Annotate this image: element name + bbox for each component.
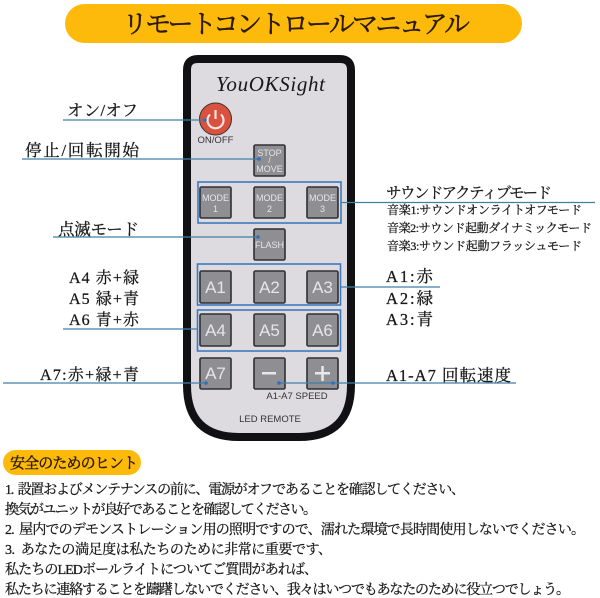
- flash button: FLASH: [255, 240, 284, 250]
- callout: A1-A3 colours: A1:赤: [386, 267, 434, 286]
- A1-A3 buttons: A2: [259, 278, 280, 297]
- callout: flash mode: [53, 220, 260, 239]
- power button: [198, 103, 234, 146]
- A4-A6 buttons: A6: [312, 321, 333, 340]
- A1-A3 buttons: A3: [312, 278, 333, 297]
- A4-A6 buttons: [200, 314, 338, 346]
- safety text: 2. 屋内でのデモンストレーション用の照明ですので、濡れた環境で長時間使用しないでください。: [5, 521, 585, 538]
- callout: flash mode: 点滅モード: [58, 220, 139, 239]
- stop/move button: [254, 145, 285, 176]
- callout: A1-A3 colours: [341, 267, 440, 329]
- callout: on/off: [63, 101, 207, 122]
- callout: A4-A6 colours: A4 赤+緑: [69, 269, 139, 287]
- callout: A1-A3 colours: A2:緑: [386, 289, 434, 308]
- callout: stop/start: 停止/回転開始: [25, 141, 140, 160]
- mode buttons: MODE: [256, 193, 283, 203]
- A1-A3 buttons: A1: [205, 278, 226, 297]
- callout: sound active mode: [341, 184, 595, 253]
- stop/move button: /: [268, 156, 271, 165]
- callout: rotation speed: [277, 366, 516, 385]
- mode buttons: MODE: [202, 193, 229, 203]
- mode buttons: 2: [267, 204, 272, 214]
- model label: LED REMOTE: [239, 414, 301, 425]
- callout: sound active mode: 音楽2:サウンド起動ダイナミックモード: [387, 220, 592, 235]
- callout: stop/start: [22, 141, 261, 161]
- safety text: 3. あなたの満足度は私たちのために非常に重要です、: [5, 541, 332, 558]
- title banner: リモートコントロールマニュアル: [122, 10, 470, 39]
- title banner: [65, 4, 522, 43]
- brand logo: YouOKSight: [216, 72, 326, 96]
- remote control: [187, 59, 351, 437]
- callout: A1-A3 colours: A3:青: [386, 310, 433, 329]
- A4-A6 buttons: A5: [259, 321, 280, 340]
- callout: rotation speed: A1-A7 回転速度: [386, 366, 511, 385]
- highlight box: A4-A6: [198, 310, 340, 351]
- callout: sound active mode: 音楽3:サウンド起動フラッシュモード: [387, 238, 582, 253]
- stop/move button: STOP: [257, 148, 282, 158]
- A7 and speed buttons: A7: [205, 364, 226, 383]
- callout: A4-A6 colours: [63, 269, 198, 329]
- safety text: 1. 設置およびメンテナンスの前に、電源がオフであることを確認してください、: [5, 482, 465, 498]
- highlight box: mode buttons: [198, 182, 341, 223]
- A1-A3 buttons: [200, 271, 338, 303]
- callout: sound active mode: サウンドアクティブモード: [386, 184, 552, 202]
- safety heading: [3, 450, 141, 475]
- safety text: [5, 482, 585, 598]
- callout: A7 colours: A7:赤+緑+青: [40, 366, 139, 384]
- safety text: 私たちに連絡することを躊躇しないでください、我々はいつでもあなたのために役立つでしょう。: [5, 581, 570, 598]
- mode buttons: 1: [213, 204, 218, 214]
- stop/move button: MOVE: [256, 164, 283, 174]
- callout: A4-A6 colours: A6 青+赤: [69, 311, 140, 329]
- remote body: [187, 59, 351, 437]
- safety heading: 安全のためのヒント: [10, 455, 138, 472]
- mode buttons: 3: [320, 204, 325, 214]
- highlight box: A1-A3: [198, 264, 340, 305]
- callout: on/off: オン/オフ: [67, 101, 138, 120]
- power button: ON/OFF: [198, 135, 234, 146]
- callout: A7 colours: [3, 366, 208, 385]
- callout: A4-A6 colours: A5 緑+青: [69, 290, 139, 308]
- flash button: [254, 229, 285, 260]
- callout: sound active mode: 音楽1:サウンドオンライトオフモード: [387, 203, 582, 217]
- speed label: A1-A7 SPEED: [266, 391, 328, 402]
- mode buttons: [200, 187, 338, 218]
- A7 and speed buttons: [200, 358, 338, 389]
- safety text: 換気がユニットが良好であることを確認してください。: [5, 501, 317, 518]
- mode buttons: MODE: [309, 193, 336, 203]
- safety text: 私たちのLEDボールライトについてご質問があれば、: [5, 562, 318, 578]
- A4-A6 buttons: A4: [205, 321, 226, 340]
